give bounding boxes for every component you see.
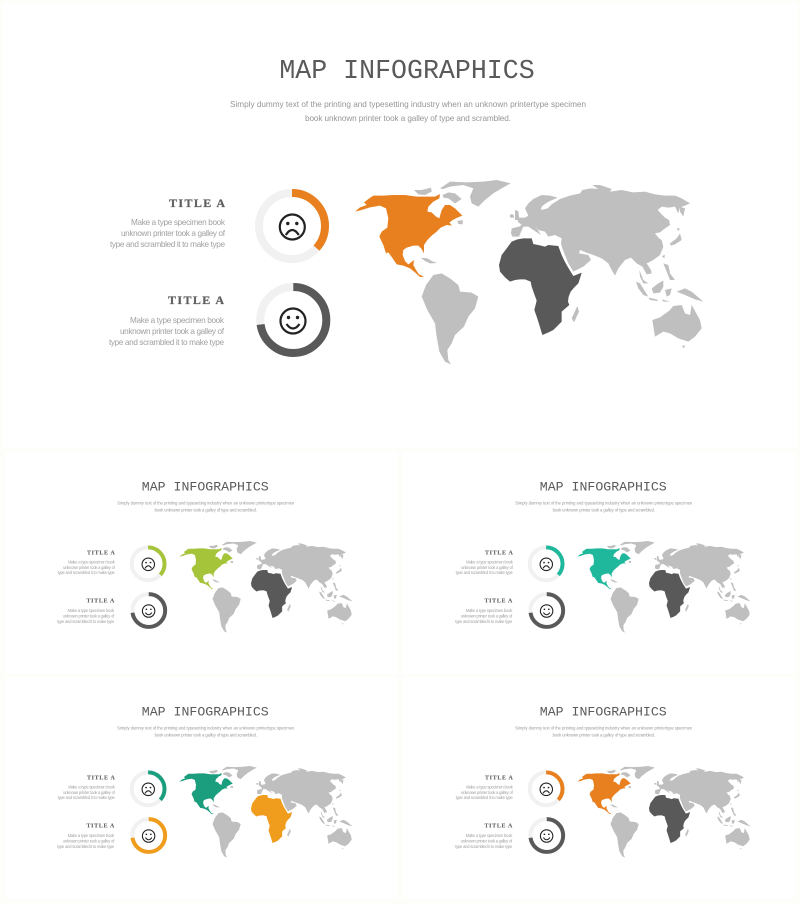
text block: title A happy xyxy=(455,824,513,849)
icon: sad face xyxy=(142,558,154,571)
title: MAP INFOGRAPHICS xyxy=(142,704,269,719)
text block: title A sad: unknown printer took a galley of xyxy=(461,565,514,570)
text block: title A happy: unknown printer took a galley of xyxy=(461,838,513,843)
text block: title A sad xyxy=(456,550,514,575)
text block: title A happy xyxy=(109,293,225,347)
subtitle xyxy=(230,100,586,123)
icon: happy face xyxy=(540,830,553,842)
text block: title A sad: TITLE A xyxy=(485,550,514,556)
text block: title A sad: Make a type specimen book xyxy=(466,559,514,564)
subtitle: book unknown printer took a galley of type and scrambled. xyxy=(553,733,655,738)
panel: emerald and amber slide xyxy=(5,677,398,899)
text block: title A happy: TITLE A xyxy=(168,293,224,307)
text block: title A sad: Make a type specimen book xyxy=(131,218,226,227)
text block: title A happy: type and scrambled it to make type xyxy=(57,619,115,624)
text block: title A happy: TITLE A xyxy=(86,599,115,605)
text block: title A sad: Make a type specimen book xyxy=(466,784,514,789)
panel: main slide xyxy=(3,3,797,448)
text block: title A sad: Make a type specimen book xyxy=(68,559,116,564)
world map xyxy=(355,180,703,364)
subtitle: book unknown printer took a galley of type and scrambled. xyxy=(305,114,511,123)
text block: title A happy: TITLE A xyxy=(484,824,513,830)
text block: title A sad: type and scrambled it to make type xyxy=(110,240,225,249)
icon: sad face xyxy=(280,214,305,240)
text block: title A sad: type and scrambled it to make type xyxy=(58,570,116,575)
ring chart: happy xyxy=(530,819,563,852)
ring chart: happy xyxy=(260,287,326,353)
subtitle: book unknown printer took a galley of type and scrambled. xyxy=(553,508,655,513)
subtitle xyxy=(515,501,692,513)
text block: title A sad: type and scrambled it to make type xyxy=(58,795,116,800)
text block: title A happy: Make a type specimen book xyxy=(466,833,513,838)
icon: happy face xyxy=(540,605,553,617)
panel: teal slide xyxy=(403,452,796,674)
ring chart: sad xyxy=(132,547,165,580)
subtitle xyxy=(117,501,294,513)
panel: green slide xyxy=(5,452,398,674)
text block: title A sad: Make a type specimen book xyxy=(68,784,116,789)
title: MAP INFOGRAPHICS xyxy=(540,704,667,719)
text block: title A happy: type and scrambled it to make type xyxy=(109,338,224,347)
text block: title A happy: Make a type specimen book xyxy=(466,608,513,613)
subtitle xyxy=(117,726,294,738)
subtitle: Simply dummy text of the printing and typesetting industry when an unknown printertype specimen xyxy=(515,501,692,506)
text block: title A sad xyxy=(110,196,226,249)
ring chart: sad xyxy=(259,193,325,259)
ring chart: happy xyxy=(132,819,165,852)
text block: title A sad: TITLE A xyxy=(87,775,116,781)
world map xyxy=(577,541,751,633)
text block: title A happy: unknown printer took a galley of xyxy=(63,613,115,618)
icon: happy face xyxy=(142,605,155,617)
icon: happy face xyxy=(142,830,155,842)
text block: title A happy: Make a type specimen book xyxy=(68,608,115,613)
text block: title A sad xyxy=(58,550,116,575)
text block: title A happy: unknown printer took a galley of xyxy=(461,613,513,618)
text block: title A sad: TITLE A xyxy=(485,775,514,781)
text block: title A sad: TITLE A xyxy=(87,550,116,556)
text block: title A happy: type and scrambled it to make type xyxy=(455,619,513,624)
text block: title A sad xyxy=(58,775,116,800)
text block: title A sad xyxy=(456,775,514,800)
subtitle: book unknown printer took a galley of type and scrambled. xyxy=(155,733,257,738)
text block: title A happy: Make a type specimen book xyxy=(68,833,115,838)
ring chart: happy xyxy=(132,594,165,627)
world map xyxy=(179,541,353,633)
text block: title A happy: TITLE A xyxy=(484,599,513,605)
text block: title A sad: unknown printer took a galley of xyxy=(121,229,226,238)
world map xyxy=(179,766,353,858)
text block: title A sad: type and scrambled it to make type xyxy=(456,570,514,575)
subtitle xyxy=(515,726,692,738)
subtitle: book unknown printer took a galley of type and scrambled. xyxy=(155,508,257,513)
icon: sad face xyxy=(540,558,552,571)
text block: title A sad: type and scrambled it to make type xyxy=(456,795,514,800)
title: MAP INFOGRAPHICS xyxy=(540,479,667,494)
text block: title A happy: unknown printer took a galley of xyxy=(63,838,115,843)
icon: sad face xyxy=(540,783,552,796)
icon: sad face xyxy=(142,783,154,796)
text block: title A sad: unknown printer took a galley of xyxy=(63,565,116,570)
ring chart: happy xyxy=(530,594,563,627)
subtitle: Simply dummy text of the printing and typesetting industry when an unknown printertype specimen xyxy=(117,501,294,506)
ring chart: sad xyxy=(530,547,563,580)
panel: orange slide xyxy=(403,677,796,899)
text block: title A happy xyxy=(57,824,115,849)
text block: title A sad: TITLE A xyxy=(169,196,225,210)
text block: title A happy: Make a type specimen book xyxy=(130,316,225,325)
text block: title A sad: unknown printer took a galley of xyxy=(461,790,514,795)
text block: title A happy xyxy=(455,599,513,624)
ring chart: sad xyxy=(132,772,165,805)
text block: title A happy: TITLE A xyxy=(86,824,115,830)
text block: title A happy xyxy=(57,599,115,624)
ring chart: sad xyxy=(530,772,563,805)
subtitle: Simply dummy text of the printing and typesetting industry when an unknown printertype specimen xyxy=(117,726,294,731)
subtitle: Simply dummy text of the printing and typesetting industry when an unknown printertype specimen xyxy=(230,100,586,109)
subtitle: Simply dummy text of the printing and typesetting industry when an unknown printertype specimen xyxy=(515,726,692,731)
text block: title A happy: type and scrambled it to make type xyxy=(455,844,513,849)
text block: title A happy: unknown printer took a galley of xyxy=(120,327,225,336)
title: MAP INFOGRAPHICS xyxy=(279,56,535,86)
title: MAP INFOGRAPHICS xyxy=(142,479,269,494)
text block: title A happy: type and scrambled it to make type xyxy=(57,844,115,849)
icon: happy face xyxy=(280,308,306,334)
world map xyxy=(577,766,751,858)
text block: title A sad: unknown printer took a galley of xyxy=(63,790,116,795)
